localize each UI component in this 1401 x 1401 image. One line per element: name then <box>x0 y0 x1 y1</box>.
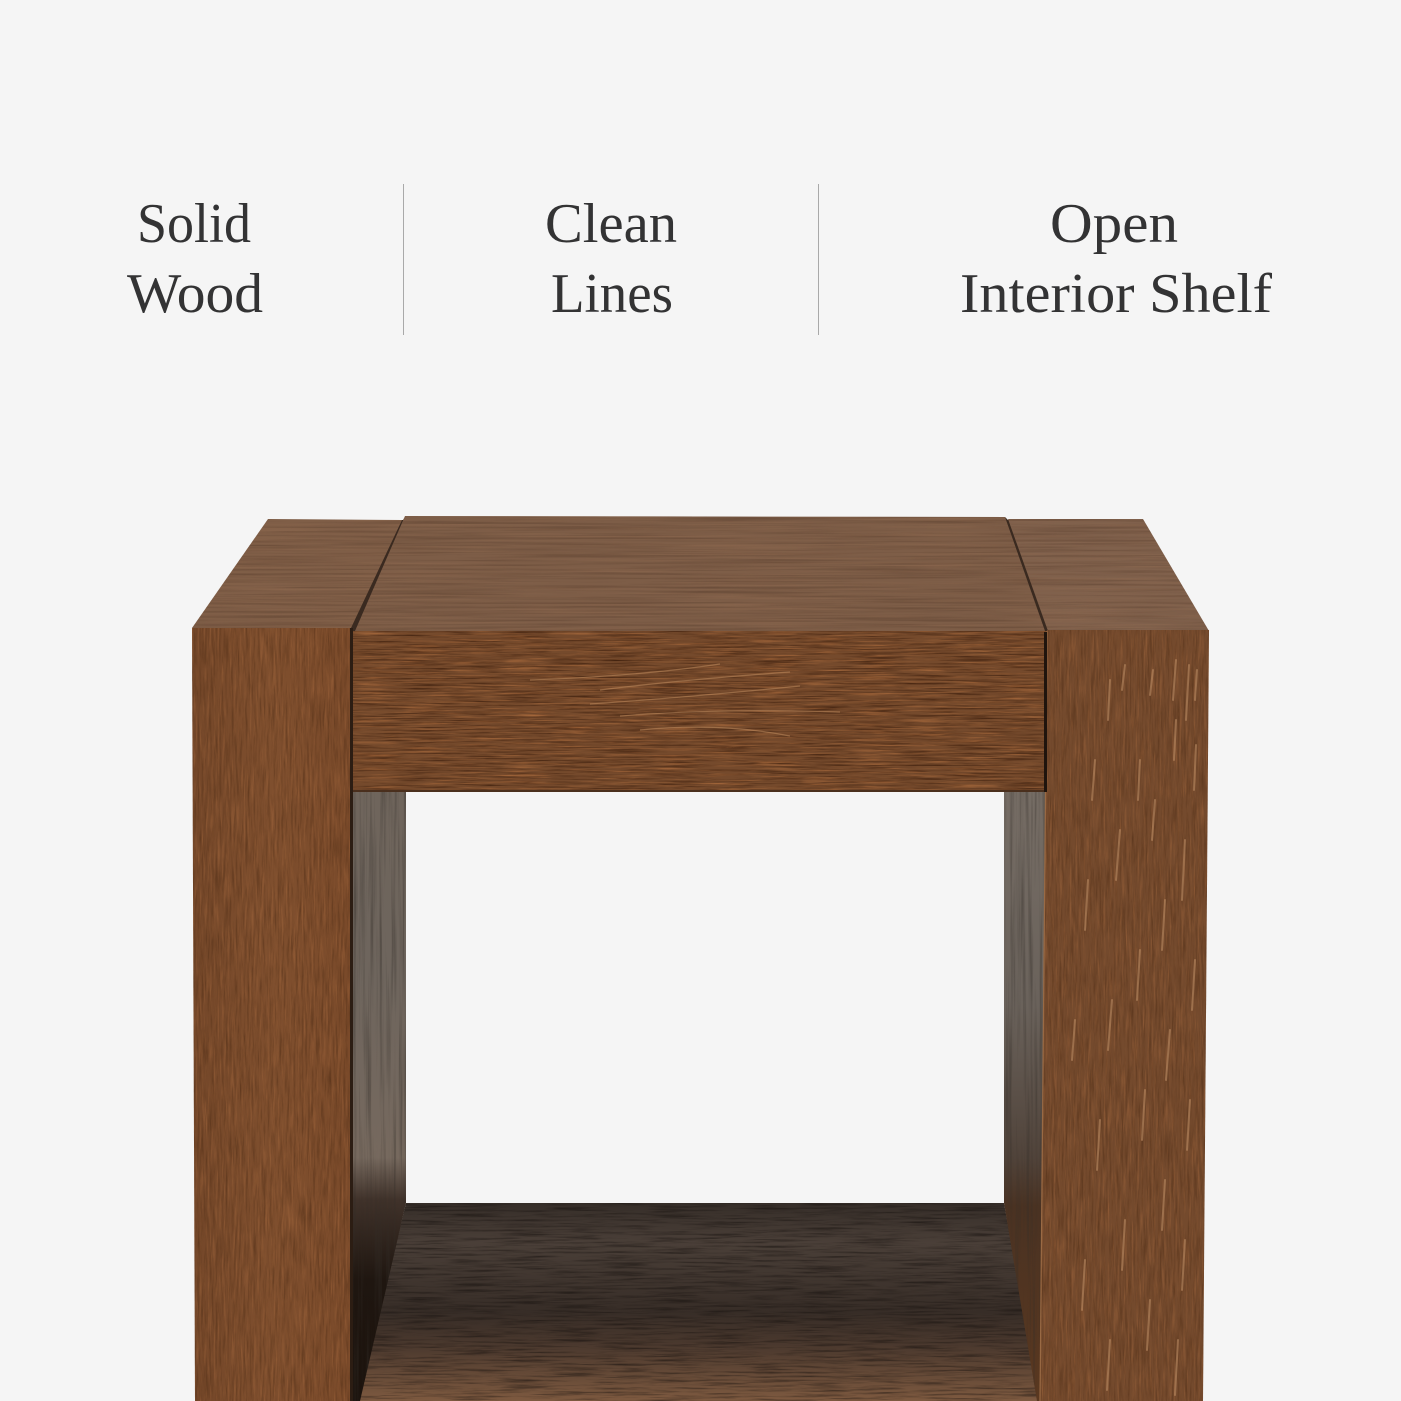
text block: Open Interior Shelf <box>960 193 1272 325</box>
left leg front <box>192 628 353 1401</box>
text block: Clean Lines: Clean <box>545 193 677 255</box>
inner left side of leg <box>351 790 406 1401</box>
text block: Solid Wood: Wood <box>127 263 263 325</box>
text block: Solid Wood <box>127 193 263 325</box>
front beam <box>353 631 1047 792</box>
text block: Solid Wood: Solid <box>137 193 251 255</box>
top surface: right end <box>1008 519 1209 631</box>
right leg front <box>1040 630 1209 1401</box>
text block: Open Interior Shelf: Open <box>1050 193 1178 255</box>
shelf surface <box>358 1203 1040 1401</box>
text block: Clean Lines: Lines <box>551 263 673 325</box>
side table photo <box>192 516 1209 1401</box>
inner right side of leg <box>1004 790 1048 1401</box>
top surface: centre <box>355 516 1045 631</box>
text block: Open Interior Shelf: Interior Shelf <box>960 263 1272 325</box>
text block: Clean Lines <box>545 193 677 325</box>
top surface: left end <box>192 519 402 628</box>
light oak flecks <box>1072 660 1197 1395</box>
